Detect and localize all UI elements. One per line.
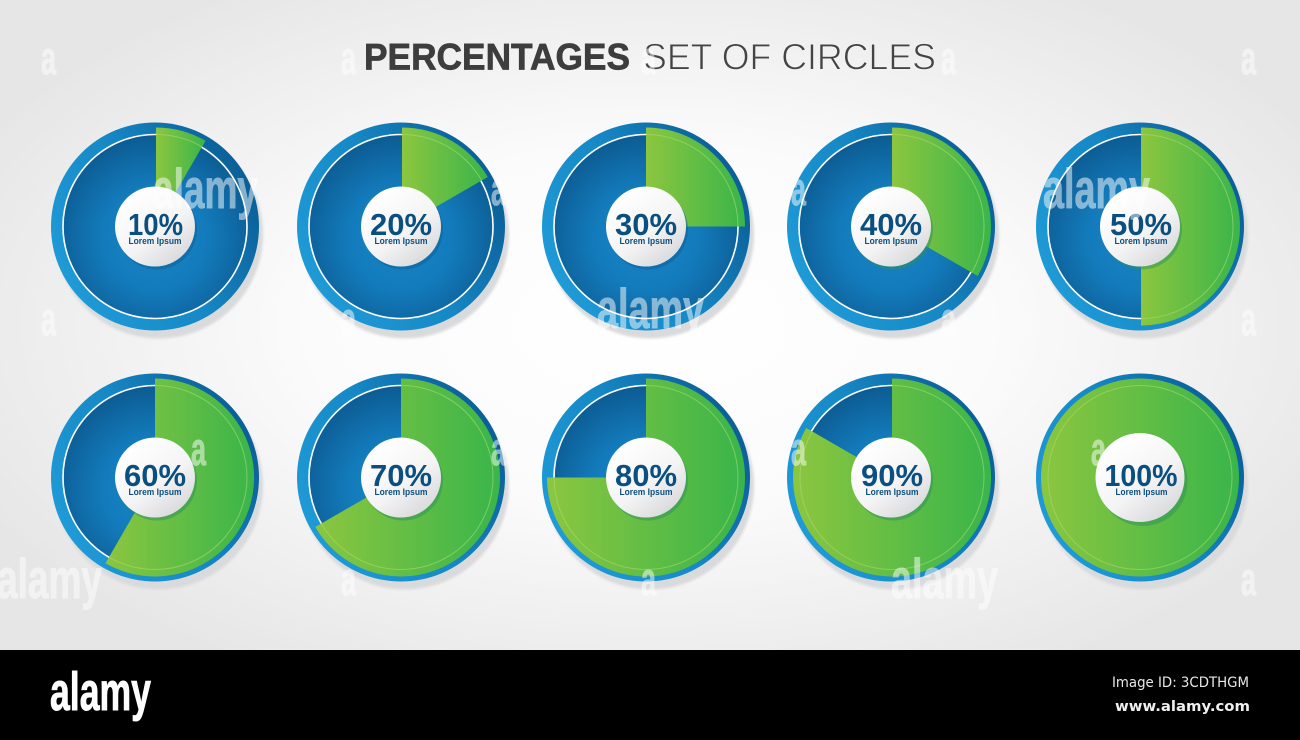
watermarks: a [791, 423, 806, 475]
label 80%: 80% [615, 458, 677, 493]
circle 70%: Lorem Ipsum [374, 487, 428, 497]
green wedge 30% [646, 128, 745, 226]
website: www.alamy.com [1115, 699, 1250, 715]
circle 90%: Lorem Ipsum [866, 487, 918, 497]
green wedge 90% [793, 378, 991, 576]
circle 100% [1036, 374, 1248, 590]
label 100%: 100% [1104, 458, 1178, 493]
circle 100%: Lorem Ipsum [1116, 487, 1168, 497]
circle 20%: Lorem Ipsum [374, 236, 428, 246]
title [364, 36, 936, 78]
title: SET OF CIRCLES [643, 36, 936, 78]
full green disc [1041, 378, 1239, 576]
green wedge 40% [892, 128, 991, 276]
watermarks: a [491, 423, 506, 475]
watermarks: a [41, 293, 56, 345]
watermarks: alamy [597, 277, 704, 340]
circle 80% [542, 374, 754, 590]
watermarks: alamy [891, 547, 998, 610]
footer logo: alamy [50, 662, 151, 722]
label 90%: 90% [861, 458, 923, 493]
label 10%: 10% [128, 207, 183, 242]
watermarks: a [1091, 423, 1106, 475]
watermarks: a [941, 293, 956, 345]
watermarks: a [341, 293, 356, 345]
image id: Image ID: 3CDTHGM [1112, 675, 1249, 691]
circle 10% [51, 122, 263, 338]
watermarks: a [641, 32, 656, 84]
footer bar [0, 650, 1300, 740]
watermarks: a [341, 32, 356, 84]
label 50%: 50% [1110, 207, 1172, 242]
circle 20% [297, 122, 509, 338]
watermarks: alamy [153, 157, 258, 220]
circle 30%: Lorem Ipsum [620, 236, 672, 246]
watermarks [0, 32, 1256, 610]
label 20%: 20% [370, 207, 432, 242]
circle 50%: Lorem Ipsum [1114, 236, 1168, 246]
label 30%: 30% [615, 207, 677, 242]
watermarks: a [1241, 553, 1256, 605]
green wedge 80% [547, 378, 745, 576]
watermarks: a [191, 423, 206, 475]
watermarks: alamy [1043, 157, 1150, 220]
watermarks: a [941, 32, 956, 84]
circle 50% [1036, 122, 1248, 338]
circle 40%: Lorem Ipsum [864, 236, 918, 246]
watermarks: a [41, 32, 56, 84]
watermarks: a [791, 163, 806, 215]
circle 30% [542, 122, 754, 338]
watermarks: a [1241, 293, 1256, 345]
label 60%: 60% [124, 458, 186, 493]
watermarks: a [491, 163, 506, 215]
circle 40% [787, 122, 999, 338]
green wedge 70% [315, 378, 500, 576]
circle 60%: Lorem Ipsum [128, 487, 182, 497]
circle 80%: Lorem Ipsum [620, 487, 672, 497]
green wedge 10% [156, 128, 206, 226]
watermarks: a [641, 553, 656, 605]
circle 10%: Lorem Ipsum [128, 236, 182, 246]
green wedge 50% [1141, 128, 1240, 326]
watermarks: a [341, 553, 356, 605]
title: PERCENTAGES [364, 36, 630, 78]
circle 90% [787, 374, 999, 590]
green wedge 20% [402, 128, 488, 226]
green wedge 60% [106, 378, 254, 576]
label 70%: 70% [370, 458, 432, 493]
circle 60% [51, 374, 263, 590]
label 40%: 40% [860, 207, 922, 242]
watermarks: a [1241, 32, 1256, 84]
circle 70% [297, 374, 509, 590]
watermarks: alamy [0, 547, 102, 610]
